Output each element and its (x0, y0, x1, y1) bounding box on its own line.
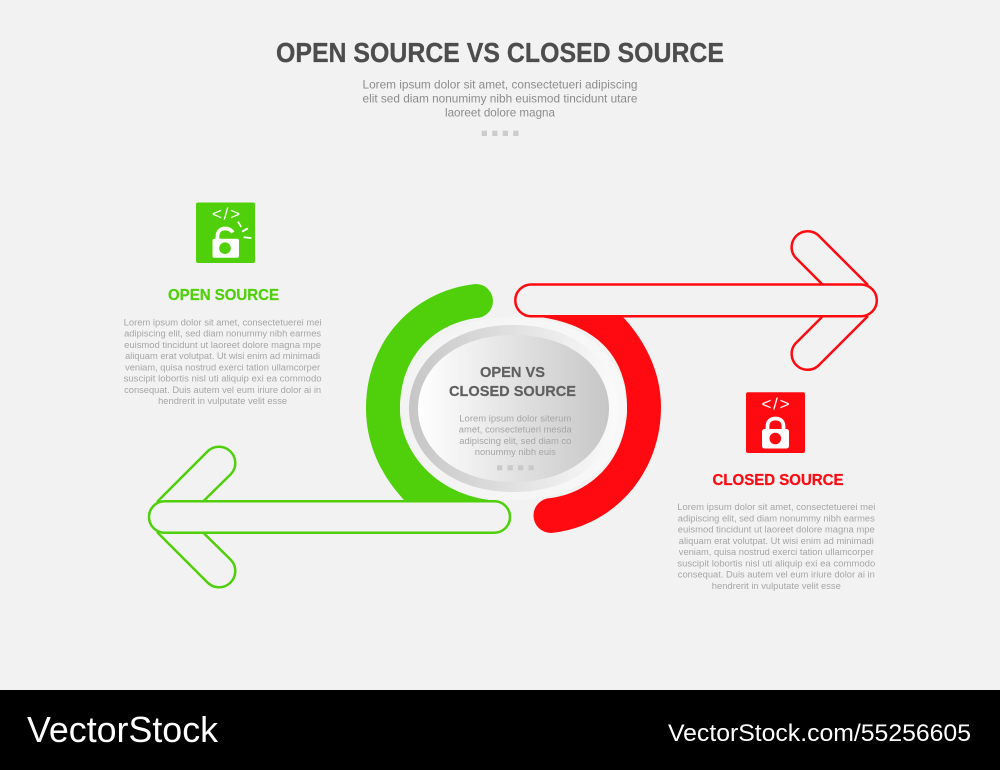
text block: closed source: Lorem ipsum dolor sit amet, consectetuerei mei (677, 502, 875, 512)
text block: open source: hendrerit in vulputate velit esse (158, 396, 287, 406)
text block: open source: veniam, quisa nostrud exerci tation ullamcorper (125, 362, 320, 372)
footer image id: VectorStock.com/55256605 (668, 720, 971, 747)
text block: closed source (677, 502, 875, 591)
subtitle text (362, 78, 638, 120)
badge heading: CLOSED SOURCE (449, 383, 576, 400)
badge text: amet, consectetueri mesda (459, 424, 572, 434)
text block: closed source: suscipit lobortis nisl uti aliquip exi ea commodo (677, 558, 875, 568)
heading: closed source: CLOSED SOURCE (712, 472, 844, 489)
subtitle text: elit sed diam nonumimy nibh euismod tincidunt utare (362, 92, 638, 106)
badge heading: OPEN VS (480, 364, 545, 381)
arrow: green pointing left (149, 447, 510, 587)
badge text: Lorem ipsum dolor siterum (459, 413, 571, 423)
text block: open source: consequat. Duis autem vel eum iriure dolor ai in (124, 385, 321, 395)
central badge (400, 317, 627, 500)
text block: closed source: euismod tincidunt ut laoreet dolore magna mpe (678, 525, 875, 535)
subtitle text: laoreet dolore magna (445, 106, 555, 120)
text block: open source: euismod tincidunt ut laoreet dolore magna mpe (124, 340, 321, 350)
heading: open source: OPEN SOURCE (168, 287, 279, 304)
text block: closed source: adipiscing elit, sed diam nonummy nibh earmes (678, 513, 875, 523)
text block: closed source: veniam, quisa nostrud exerci tation ullamcorper (679, 547, 874, 557)
arc: green (366, 284, 500, 501)
icon: closed padlock with code: </> (762, 394, 790, 414)
badge text (459, 413, 572, 457)
badge text: nonummy nibh euis (475, 447, 556, 457)
subtitle text: Lorem ipsum dolor sit amet, consectetueri adipiscing (362, 78, 638, 92)
title dots (482, 131, 518, 136)
footer bar (0, 690, 1000, 770)
text block: open source (124, 317, 322, 406)
badge text: adipiscing elit, sed diam co (459, 436, 571, 446)
icon: open padlock with code: </> (212, 204, 240, 224)
text block: open source: aliquam erat volutpat. Ut wisi enim ad minimadi (125, 351, 320, 361)
icon: open padlock with code (196, 202, 255, 263)
footer logo text: VectorStock (27, 709, 219, 750)
text block: closed source: aliquam erat volutpat. Ut wisi enim ad minimadi (679, 536, 874, 546)
panel: closed source (677, 392, 875, 591)
text block: open source: adipiscing elit, sed diam nonummy nibh earmes (124, 329, 322, 339)
badge dots (497, 465, 534, 470)
title: OPEN SOURCE VS CLOSED SOURCE (276, 37, 724, 68)
text block: closed source: hendrerit in vulputate velit esse (712, 581, 841, 591)
arrow: red pointing right (515, 231, 877, 370)
arc: red (530, 316, 661, 533)
badge heading (449, 364, 576, 400)
panel: open source (124, 202, 322, 406)
text block: open source: Lorem ipsum dolor sit amet, consectetuerei mei (124, 317, 322, 327)
text block: open source: suscipit lobortis nisl uti aliquip exi ea commodo (124, 374, 322, 384)
icon: closed padlock with code (746, 392, 805, 453)
text block: closed source: consequat. Duis autem vel eum iriure dolor ai in (678, 570, 875, 580)
